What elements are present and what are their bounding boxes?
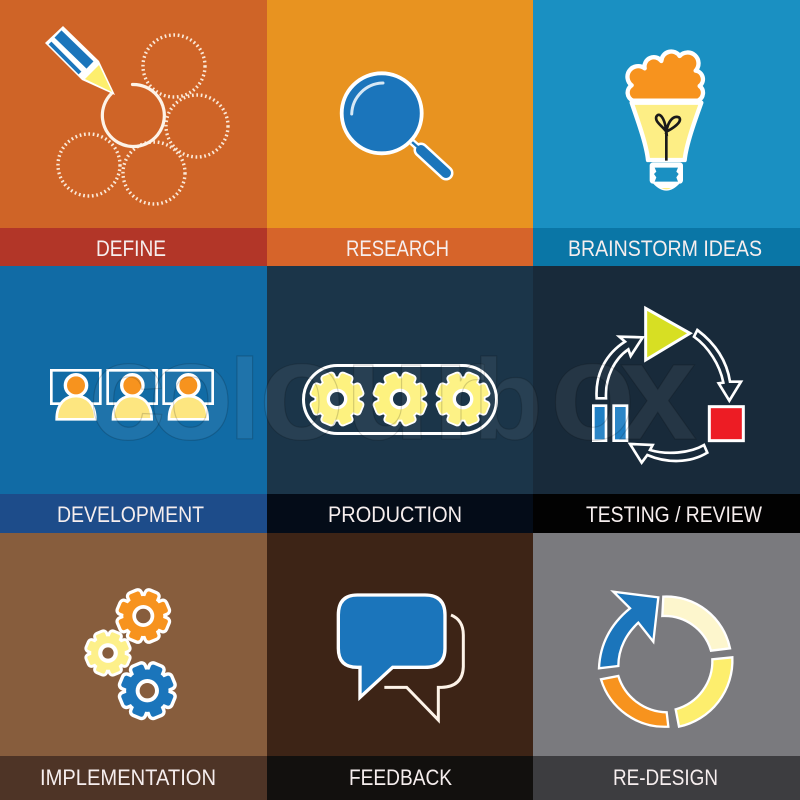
icon: light bulb with brain xyxy=(627,52,703,191)
label bar: development: DEVELOPMENT xyxy=(57,502,204,527)
icon: pencil drawing circles xyxy=(45,26,228,204)
watermark: x xyxy=(619,312,697,469)
icon: circular redesign arrow xyxy=(599,592,732,727)
label bar: define: DEFINE xyxy=(96,236,166,261)
panel: define xyxy=(0,0,267,267)
label bar: research: RESEARCH xyxy=(346,236,449,261)
label bar: brainstorm ideas: BRAINSTORM IDEAS xyxy=(568,236,762,261)
panel: production xyxy=(267,266,533,533)
panel: research xyxy=(267,0,533,267)
label bar: re-design xyxy=(533,756,800,800)
label bar: feedback xyxy=(267,756,533,800)
panel: testing / review xyxy=(533,266,800,533)
label bar: research xyxy=(267,228,533,266)
watermark: r xyxy=(432,312,486,469)
icon: play, stop, pause cycle xyxy=(593,308,743,463)
label bar: production xyxy=(267,494,533,533)
watermark: c xyxy=(88,312,166,469)
panel: development xyxy=(0,266,267,533)
icon: speech bubbles xyxy=(338,595,463,720)
panel: re-design xyxy=(533,533,800,800)
icon: three gears xyxy=(81,583,182,725)
label bar: implementation: IMPLEMENTATION xyxy=(40,765,216,790)
label bar: production: PRODUCTION xyxy=(328,502,462,527)
label bar: re-design: RE-DESIGN xyxy=(613,765,718,790)
watermark: u xyxy=(345,312,431,469)
label bar: testing / review xyxy=(533,494,800,533)
icon: three gears in a pill xyxy=(303,365,497,434)
icon: three people in frames xyxy=(51,370,213,419)
label bar: implementation xyxy=(0,756,267,800)
label bar: development xyxy=(0,494,267,533)
panel: brainstorm ideas xyxy=(533,0,800,267)
label bar: testing / review: TESTING / REVIEW xyxy=(586,502,762,527)
watermark: l xyxy=(229,337,261,464)
label bar: define xyxy=(0,228,267,266)
watermark: o xyxy=(550,312,636,469)
label bar: feedback: FEEDBACK xyxy=(349,765,452,790)
watermark: b xyxy=(473,337,543,464)
watermark: o xyxy=(148,312,234,469)
icon: magnifying glass xyxy=(342,73,446,173)
panel: implementation xyxy=(0,533,267,800)
label bar: brainstorm ideas xyxy=(533,228,800,266)
watermark: o xyxy=(259,312,345,469)
panel: feedback xyxy=(267,533,533,800)
